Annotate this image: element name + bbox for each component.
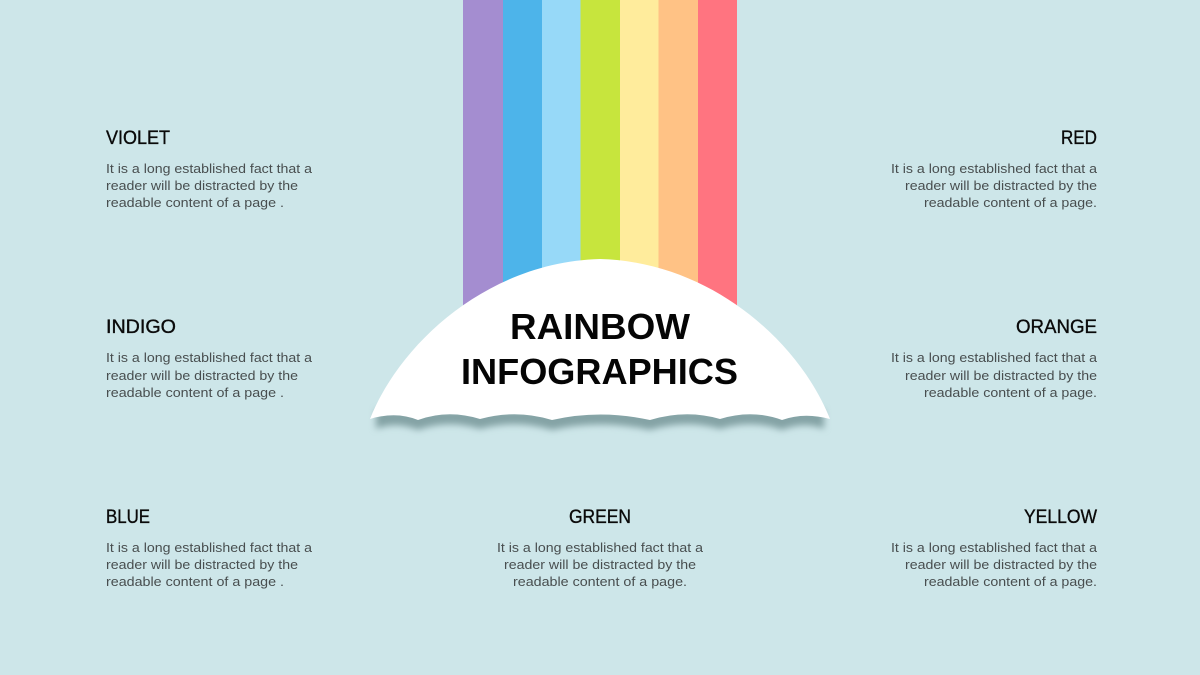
text block: violet: reader will be distracted by the	[106, 179, 298, 193]
text block: orange: readable content of a page.	[924, 386, 1097, 400]
text block: orange: ORANGE	[1016, 317, 1097, 338]
text block: orange: reader will be distracted by the	[905, 369, 1097, 383]
text block: yellow	[891, 507, 1097, 589]
title	[461, 306, 738, 392]
text block: violet: VIOLET	[106, 128, 170, 149]
rainbow stripes	[463, 0, 737, 320]
text block: red: readable content of a page.	[924, 196, 1097, 210]
text block: orange	[891, 317, 1097, 400]
text block: indigo	[106, 317, 312, 400]
text block: blue: It is a long established fact that a	[106, 541, 312, 555]
title: INFOGRAPHICS	[461, 351, 738, 392]
text block: indigo: It is a long established fact that a	[106, 351, 312, 365]
text block: yellow: readable content of a page.	[924, 575, 1097, 589]
text block: violet: It is a long established fact that a	[106, 162, 312, 176]
text block: red: reader will be distracted by the	[905, 179, 1097, 193]
text block: green: GREEN	[569, 507, 631, 528]
text block: red	[891, 128, 1097, 210]
title: RAINBOW	[510, 306, 691, 347]
umbrella canopy	[370, 259, 830, 420]
text block: blue: BLUE	[106, 507, 150, 528]
text block: violet: readable content of a page .	[106, 196, 284, 210]
text block: indigo: INDIGO	[106, 317, 176, 338]
text block: yellow: YELLOW	[1024, 507, 1097, 528]
text block: blue: readable content of a page .	[106, 575, 284, 589]
text block: red: RED	[1061, 128, 1097, 149]
text block: yellow: reader will be distracted by the	[905, 558, 1097, 572]
text block: green: It is a long established fact that a	[497, 541, 703, 555]
text block: orange: It is a long established fact that a	[891, 351, 1097, 365]
text block: indigo: reader will be distracted by the	[106, 369, 298, 383]
umbrella shadow	[376, 410, 824, 430]
text block: indigo: readable content of a page .	[106, 386, 284, 400]
text block: violet	[106, 128, 312, 210]
text block: yellow: It is a long established fact that a	[891, 541, 1097, 555]
text block: red: It is a long established fact that a	[891, 162, 1097, 176]
text block: blue: reader will be distracted by the	[106, 558, 298, 572]
text block: blue	[106, 507, 312, 589]
text block: green: readable content of a page.	[513, 575, 687, 589]
text block: green: reader will be distracted by the	[504, 558, 696, 572]
text block: green	[497, 507, 703, 589]
